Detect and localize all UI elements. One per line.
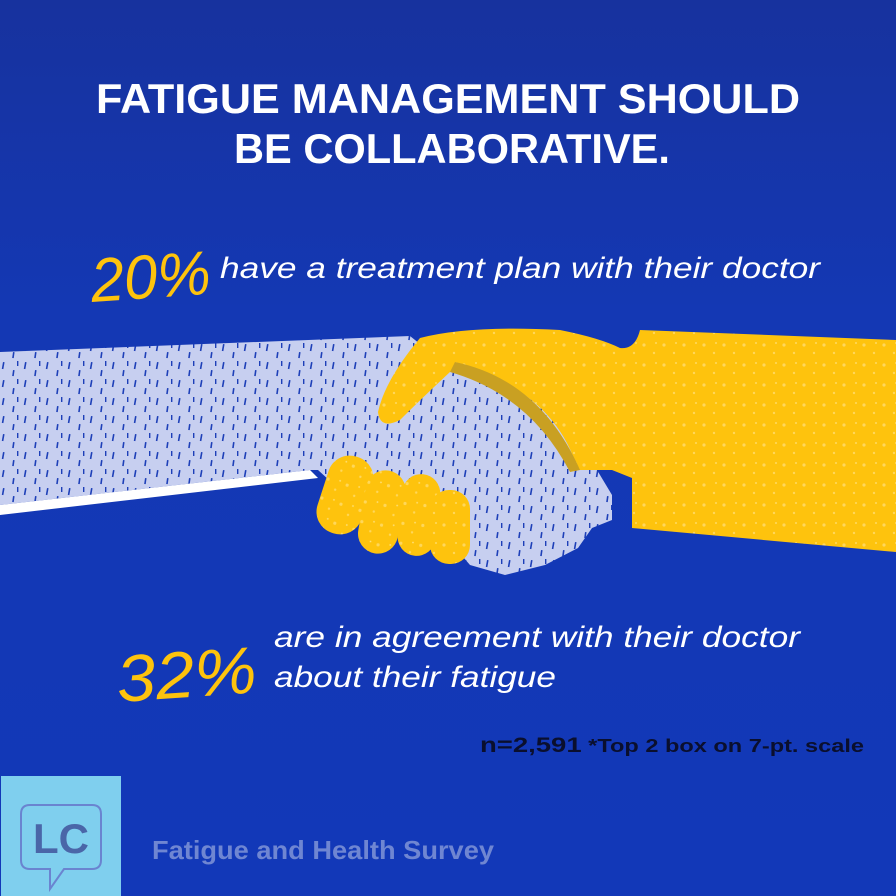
gold fingers <box>311 450 470 564</box>
stat 32%: about their fatigue <box>274 661 556 694</box>
footnote: n=2,591 *Top 2 box on 7-pt. scale <box>480 734 864 757</box>
cuff shadow band <box>450 362 580 472</box>
logo: LC <box>33 815 89 862</box>
stat 20%: 20% <box>87 239 213 316</box>
yellow arm <box>378 329 896 552</box>
title: BE COLLABORATIVE. <box>234 125 670 172</box>
title: FATIGUE MANAGEMENT SHOULD <box>96 75 800 122</box>
title <box>96 75 800 172</box>
light arm <box>0 336 612 575</box>
stat 20%: have a treatment plan with their doctor <box>220 252 821 285</box>
illustration: handshake <box>0 329 896 575</box>
stat 20% <box>87 239 821 316</box>
stat 32%: are in agreement with their doctor <box>274 621 801 654</box>
footer text: Fatigue and Health Survey <box>152 835 495 865</box>
logo <box>1 776 121 896</box>
stat 32%: 32% <box>114 632 259 716</box>
stat 32% <box>114 621 801 716</box>
